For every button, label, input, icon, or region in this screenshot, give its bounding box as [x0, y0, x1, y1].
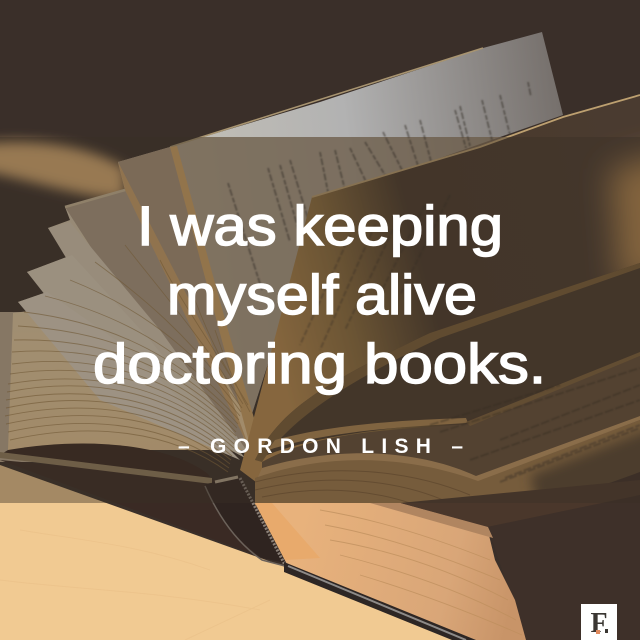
- cover strip along the table: [284, 562, 476, 640]
- spine: [205, 477, 285, 566]
- left cover board: [0, 452, 212, 484]
- logo badge: [581, 604, 617, 640]
- book cover shadow: [0, 460, 285, 562]
- printed text lines on back page: [228, 82, 531, 290]
- back page with printed text: [170, 32, 565, 420]
- book fore edge: [255, 480, 640, 640]
- quote text: [93, 194, 546, 395]
- quote line 2: myself alive: [167, 263, 477, 326]
- blurred lamp glow: [0, 142, 125, 198]
- golden page wedge beside spine: [255, 503, 320, 560]
- page edge lines: [5, 245, 250, 472]
- quote line 1: I was keeping: [137, 194, 503, 257]
- curved right page: [255, 263, 640, 462]
- faded left backdrop: [0, 312, 70, 462]
- faint print on large right page: [300, 195, 450, 350]
- fanned left pages: [8, 146, 262, 460]
- translucent text band: [0, 137, 640, 503]
- large right page: [240, 95, 640, 500]
- table grain highlights: [0, 530, 270, 640]
- attribution: – GORDON LISH –: [178, 435, 463, 458]
- lower right dark book block: [487, 472, 640, 640]
- dark gap under left pages: [0, 444, 212, 480]
- glow on right edge of page: [610, 150, 640, 290]
- lower right pages: [255, 352, 640, 515]
- logo badge: F: [590, 608, 608, 639]
- quote line 3: doctoring books.: [93, 332, 546, 395]
- wooden table: [0, 465, 475, 640]
